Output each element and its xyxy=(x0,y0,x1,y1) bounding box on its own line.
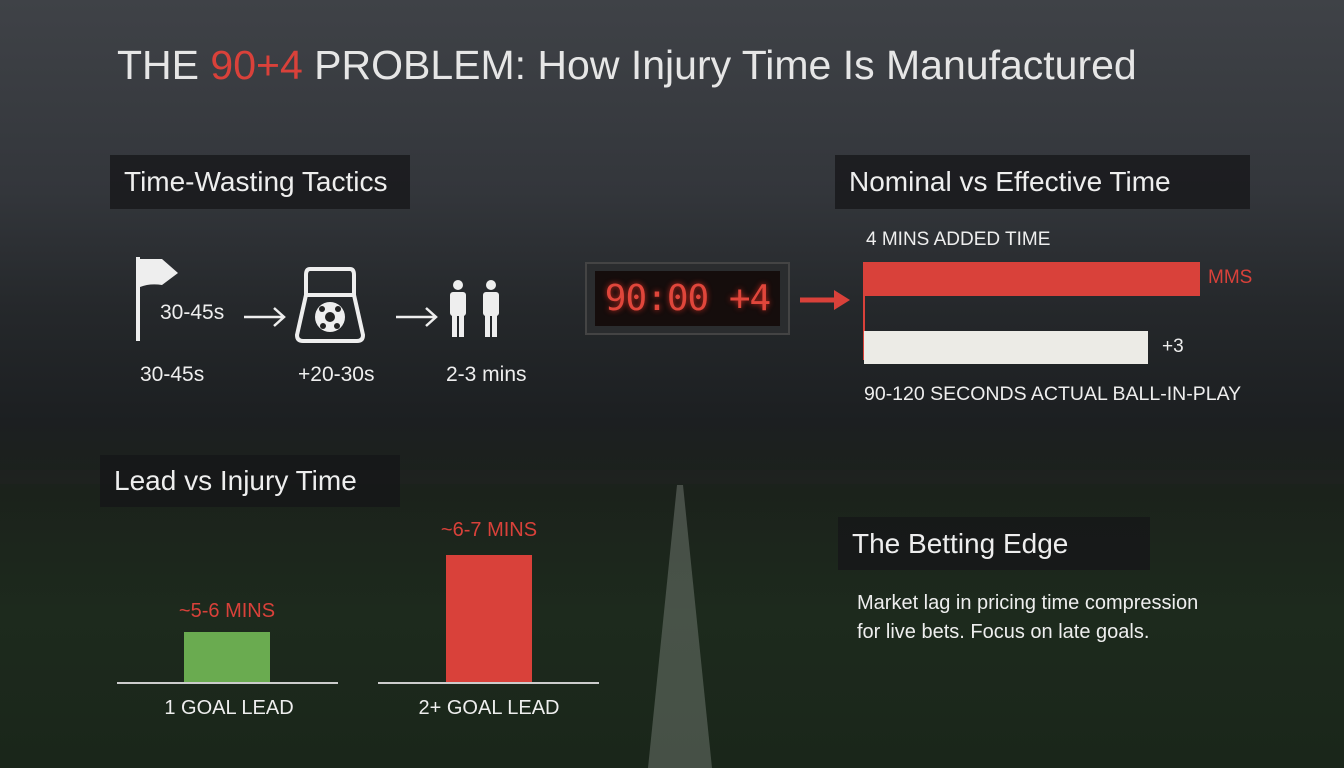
arrow 2 xyxy=(396,307,438,327)
icon: players xyxy=(450,280,499,337)
panel: time-wasting tactics: 2-3 mins xyxy=(446,363,527,386)
panel: nominal vs effective: 4 MINS ADDED TIME xyxy=(866,229,1050,250)
panel: nominal vs effective: MMS xyxy=(1208,267,1252,288)
arrow 1 xyxy=(244,307,286,327)
scoreboard xyxy=(585,262,790,335)
bar chart: 1 GOAL LEAD xyxy=(164,697,294,719)
panel: time-wasting tactics xyxy=(110,155,527,386)
icon: ball bag xyxy=(295,267,365,343)
panel: nominal vs effective xyxy=(835,155,1252,405)
bar chart xyxy=(117,519,599,719)
heading xyxy=(838,517,1150,570)
scoreboard: 90:00 +4 xyxy=(605,278,770,319)
panel: time-wasting tactics: +20-30s xyxy=(298,363,374,386)
bar chart: 2+ GOAL LEAD xyxy=(418,697,560,719)
bar chart: ~6-7 MINS xyxy=(441,519,537,541)
labels: 30-45s xyxy=(140,363,204,386)
heading xyxy=(835,155,1250,209)
icon: corner flag xyxy=(136,257,178,341)
heading: Time-Wasting Tactics xyxy=(124,166,387,197)
title: THE 90+4 PROBLEM: How Injury Time Is Manufactured xyxy=(117,42,1137,88)
heading xyxy=(100,455,400,507)
panel: betting edge: for live bets. Focus on late goals. xyxy=(857,621,1149,643)
panel: betting edge xyxy=(838,517,1198,643)
panel: lead vs injury time xyxy=(100,455,599,719)
heading: The Betting Edge xyxy=(852,528,1068,558)
panel: nominal vs effective: +3 xyxy=(1162,336,1184,357)
heading: Nominal vs Effective Time xyxy=(849,166,1171,197)
heading: Lead vs Injury Time xyxy=(114,465,357,496)
bar chart: ~5-6 MINS xyxy=(179,600,275,622)
heading xyxy=(110,155,410,209)
panel: betting edge: Market lag in pricing time compression xyxy=(857,592,1198,614)
arrow: red xyxy=(800,290,850,310)
bar: effective xyxy=(864,331,1148,364)
bar: nominal xyxy=(864,262,1200,296)
panel: nominal vs effective: 90-120 SECONDS ACTUAL BALL-IN-PLAY xyxy=(864,383,1241,405)
text: 30-45s inline: 30-45s xyxy=(160,301,224,324)
